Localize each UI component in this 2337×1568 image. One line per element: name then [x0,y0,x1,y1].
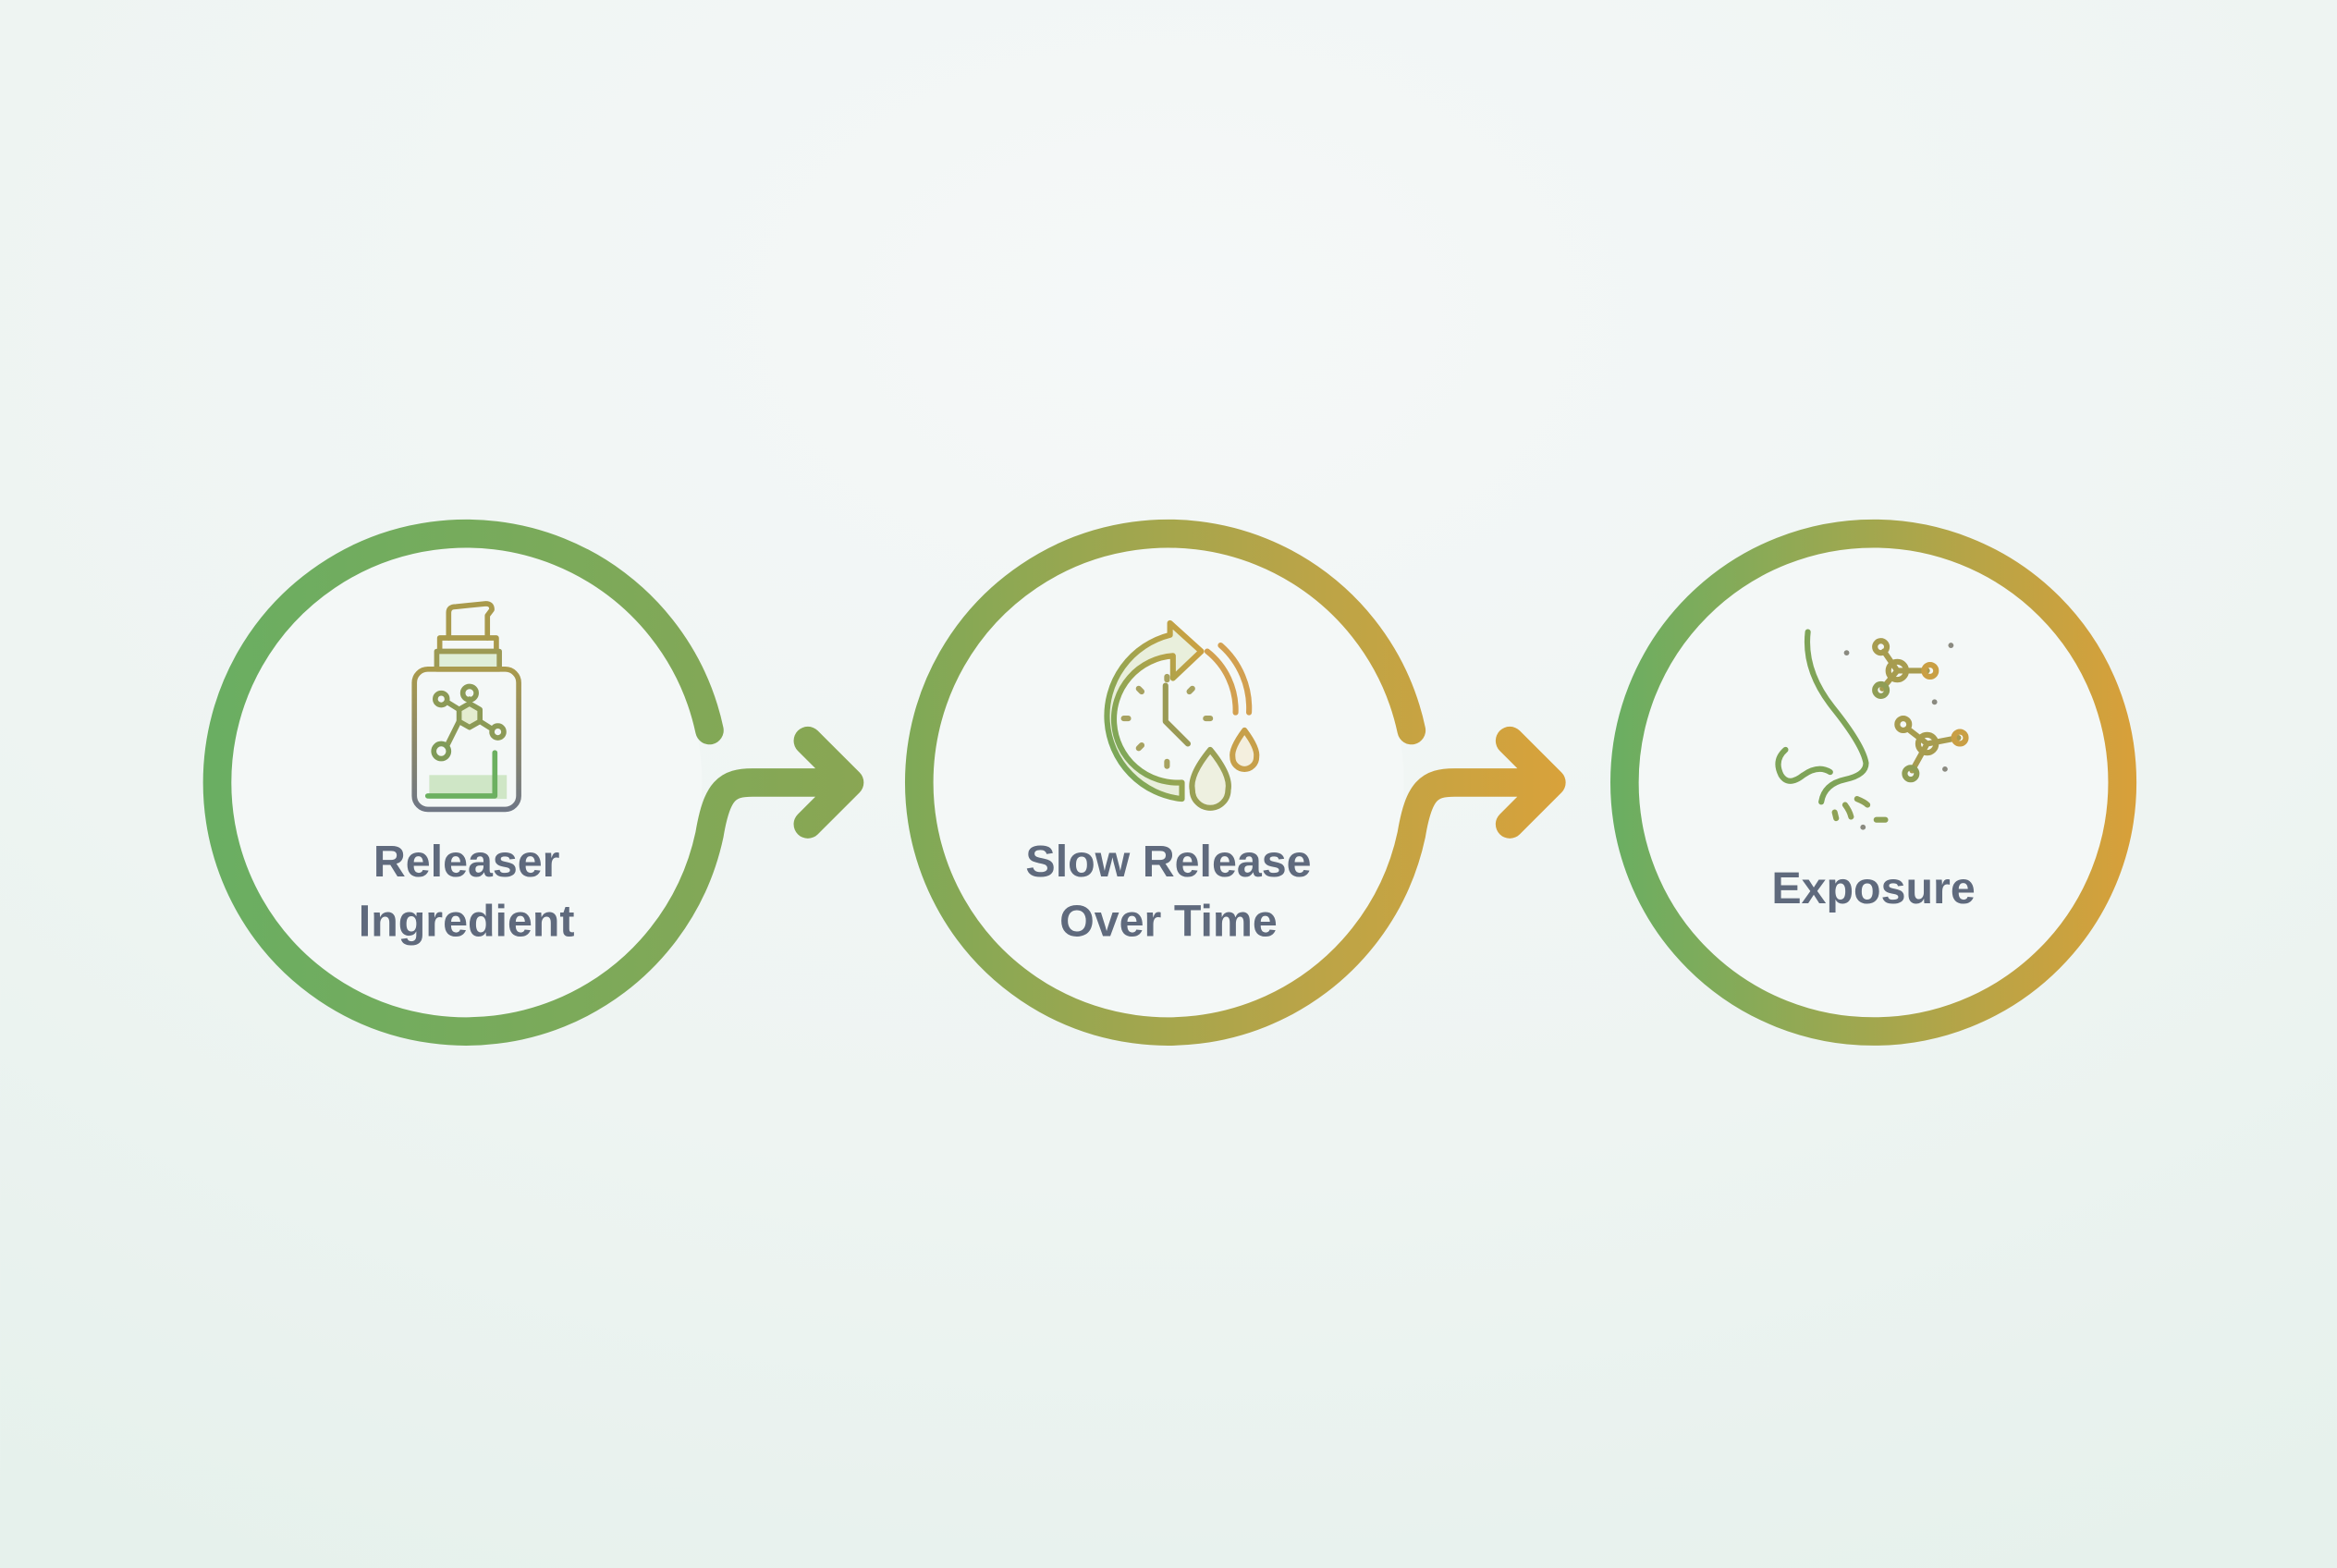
step 3: exposure [1624,533,2123,1032]
ring with arrow 1 [217,533,850,1032]
step 1: releaser ingredient: Ingredient [359,896,575,946]
icon: bottle [414,604,519,809]
step 2: slow release over time: Over Time [1059,896,1278,946]
icon: clock with arrow and drops [1107,623,1256,808]
label: Slow Release Over Time: Slow Release [1025,837,1312,887]
label: Releaser Ingredient: Releaser [373,837,560,887]
label: Exposure: Exposure [1771,864,1976,913]
step 1: releaser ingredient [217,533,850,1032]
ring 3 [1624,533,2123,1032]
step 2: slow release over time [919,533,1551,1032]
ring with arrow 2 [919,533,1551,1032]
icon: nose with molecules [1779,632,1966,820]
